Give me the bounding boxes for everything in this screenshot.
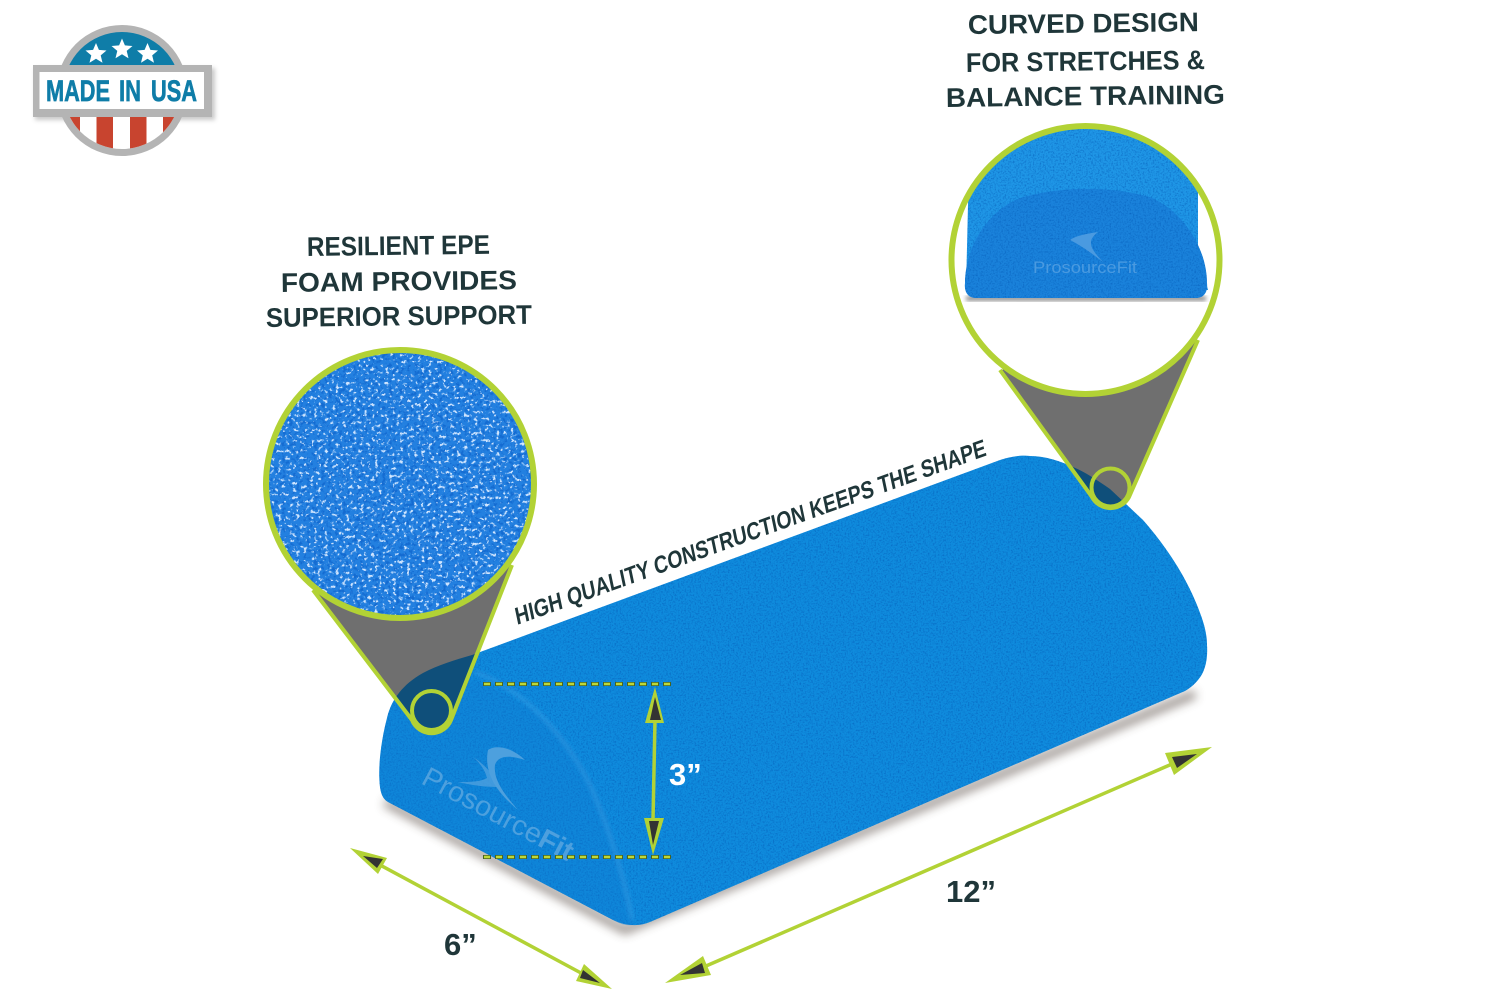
badge text: IN xyxy=(119,75,141,108)
half round foam roller xyxy=(379,456,1207,925)
badge text: MADE xyxy=(46,75,110,108)
label: 12 inch: 12” xyxy=(946,874,996,909)
front edge highlight xyxy=(475,672,632,920)
embossed logo: ProsourceFit xyxy=(417,761,579,867)
magnified roller end: ProsourceFit xyxy=(1033,258,1137,277)
curved top label: HIGH QUALITY CONSTRUCTION KEEPS THE SHAPE xyxy=(513,435,989,631)
heading: resilient foam xyxy=(266,230,533,333)
arrow: length 12 inch xyxy=(665,747,1212,983)
badge text: USA xyxy=(151,75,197,108)
magnified foam texture xyxy=(263,347,537,621)
label: 6 inch: 6” xyxy=(444,927,477,962)
heading: resilient foam: FOAM PROVIDES xyxy=(281,265,517,298)
heading: curved design: FOR STRETCHES & xyxy=(966,45,1205,78)
heading: resilient foam: SUPERIOR SUPPORT xyxy=(266,300,533,333)
magnified roller end xyxy=(965,120,1208,301)
heading: resilient foam: RESILIENT EPE xyxy=(307,230,490,262)
height guides: dashed xyxy=(483,684,672,857)
callout: foam texture xyxy=(263,347,537,736)
callout: curved end xyxy=(948,123,1222,510)
badge: made in USA xyxy=(33,25,215,156)
front face of roller xyxy=(379,673,633,925)
badge text xyxy=(46,75,197,108)
heading: curved design: BALANCE TRAINING xyxy=(946,80,1225,113)
arrow: width 6 inch xyxy=(350,848,612,989)
label: 3 inch: 3” xyxy=(669,757,702,792)
heading: curved design: CURVED DESIGN xyxy=(968,7,1199,40)
arrow: height 3 inch xyxy=(644,687,664,855)
foam shadow xyxy=(385,694,1195,930)
heading: curved design xyxy=(946,7,1225,113)
